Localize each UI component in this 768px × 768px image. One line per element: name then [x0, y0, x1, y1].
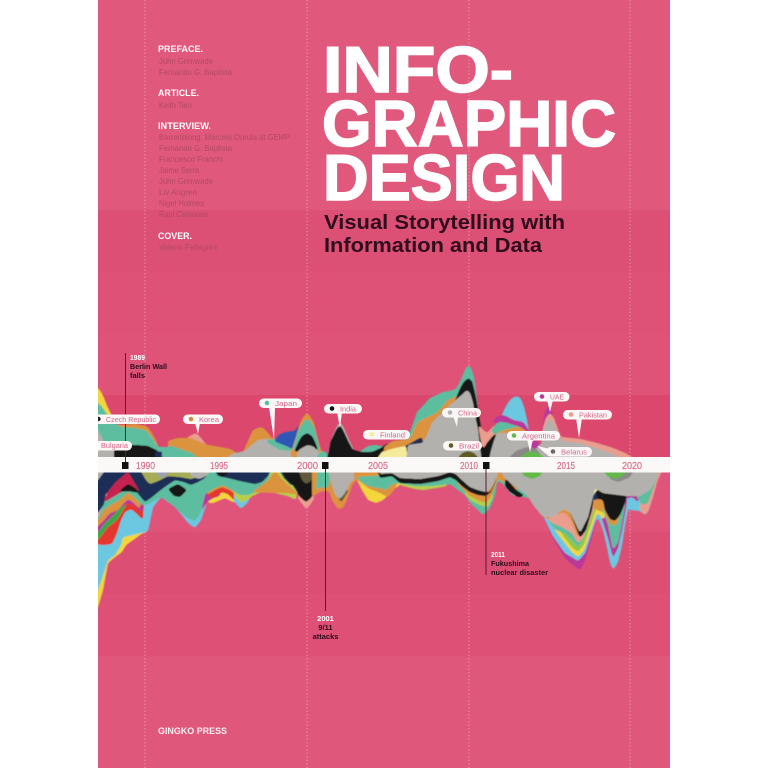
event: 2011 Fukushima nuclear disaster: nuclear disaster	[491, 568, 548, 577]
book cover background	[98, 0, 670, 768]
event: 2011 Fukushima nuclear disaster: Fukushima	[491, 559, 530, 568]
publisher: GINGKO PRESS	[158, 726, 227, 737]
label: India	[324, 404, 362, 428]
title: GRAPHIC	[322, 87, 616, 160]
country labels	[90, 392, 612, 456]
event: 1989 Berlin Wall falls: Berlin Wall	[130, 362, 167, 371]
label: Finland: Finland	[380, 430, 405, 440]
year labels: 2005	[368, 461, 388, 472]
timeline axis band	[98, 457, 670, 472]
interview names: Jaime Serra	[159, 166, 200, 175]
label: Belarus	[537, 446, 592, 456]
event: 2001 9/11 attacks: 9/11	[318, 623, 333, 632]
upper streamgraph	[90, 365, 642, 463]
heading: article: ARTICLE.	[158, 88, 199, 99]
year labels: 1990	[136, 461, 155, 472]
label: UAE: UAE	[550, 392, 564, 402]
year labels: 1995	[210, 461, 228, 472]
label: Finland	[363, 430, 410, 440]
event: 2001 9/11 attacks	[313, 462, 338, 641]
label: Belarus: Belarus	[561, 448, 587, 456]
year labels: 2000	[297, 461, 318, 472]
interview names: Francesco Franchi	[159, 155, 223, 164]
event: 2001 9/11 attacks: attacks	[313, 632, 338, 641]
label: Pakistan	[563, 410, 612, 438]
subtitle: Information and Data	[324, 235, 543, 257]
interview names: Nigel Holmes	[159, 199, 204, 208]
interview names: Liv Angren	[159, 188, 197, 197]
credits column	[158, 44, 290, 252]
label: Czech Republic: Czech Republic	[106, 415, 156, 424]
label: Bulgaria	[90, 441, 132, 450]
label: Bulgaria: Bulgaria	[101, 441, 129, 450]
subtitle	[324, 212, 565, 257]
preface names: John Grimwade	[159, 57, 214, 66]
label: Pakistan: Pakistan	[579, 410, 607, 420]
interview names: Fernando G. Baptista	[159, 144, 233, 153]
label: China: China	[458, 408, 478, 418]
interview names: John Grimwade	[159, 177, 214, 186]
lower streamgraph	[90, 466, 664, 625]
heading: preface: PREFACE.	[158, 44, 203, 55]
label: Korea	[183, 414, 223, 434]
subtitle: Visual Storytelling with	[324, 212, 565, 234]
title	[322, 33, 616, 214]
label: Japan	[259, 398, 302, 440]
heading: interview: INTERVIEW.	[158, 121, 211, 132]
preface names	[159, 57, 233, 77]
interview names: Barrenblong, Marcela Ourula at GEMP	[159, 133, 290, 142]
year labels: 2010	[460, 461, 478, 472]
event: 2011 Fukushima nuclear disaster	[483, 462, 548, 577]
label: Argentina: Argentina	[522, 432, 556, 440]
interview names: Raul Camanas	[159, 210, 208, 219]
label: India: India	[340, 404, 357, 414]
year labels	[136, 461, 642, 472]
heading: cover: COVER.	[158, 231, 192, 242]
label: Brazil	[443, 441, 482, 450]
interview names	[159, 133, 290, 219]
event: 1989 Berlin Wall falls: falls	[130, 371, 145, 380]
label: Argentina	[507, 431, 560, 452]
label: Brazil: Brazil	[459, 442, 479, 450]
title: DESIGN	[323, 141, 565, 214]
label: UAE	[534, 392, 570, 412]
cover designer: Valerio Pellegrini	[159, 243, 217, 252]
event: 1989 Berlin Wall falls	[122, 353, 167, 469]
event: 2001 9/11 attacks: 2001	[317, 614, 334, 623]
year labels: 2020	[622, 461, 642, 472]
event: 1989 Berlin Wall falls: 1989	[130, 353, 145, 362]
article name: Keith Tam	[159, 101, 192, 110]
label: Japan: Japan	[275, 399, 297, 408]
title: INFO-	[323, 33, 513, 106]
year labels: 2015	[557, 461, 575, 472]
label: China	[442, 408, 481, 427]
preface names: Fernando G. Baptista	[159, 68, 233, 77]
event: 2011 Fukushima nuclear disaster: 2011	[491, 550, 505, 559]
label: Korea: Korea	[199, 415, 220, 424]
